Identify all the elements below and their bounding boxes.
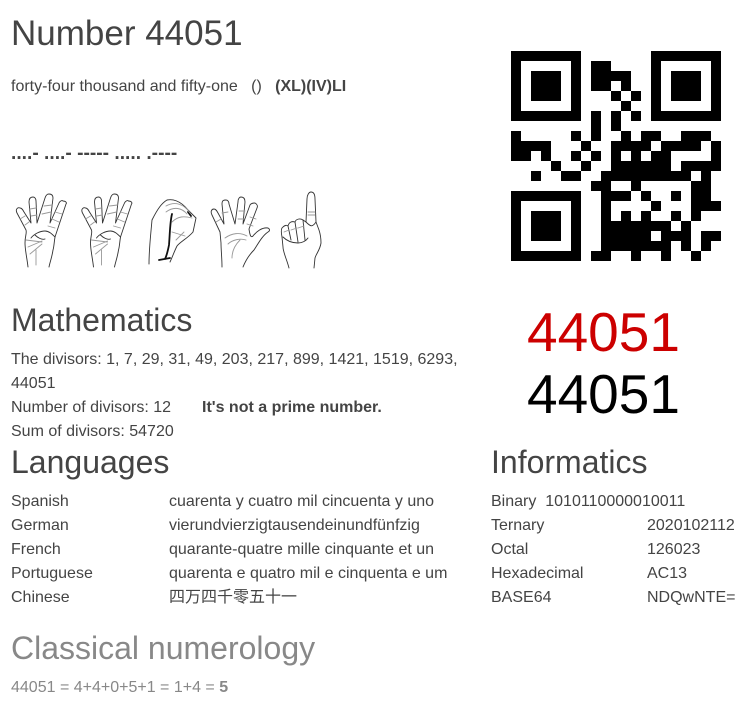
informatics labels: Hexadecimal [491, 565, 583, 582]
number in languages: cuarenta y cuatro mil cincuenta y uno [169, 493, 434, 510]
informatics labels: Ternary [491, 517, 544, 534]
morse code: ....- ....- ----- ..... .---- [11, 143, 177, 164]
divisors list: 44051 [11, 375, 56, 392]
number in languages: vierundvierzigtausendeinundfünfzig [169, 517, 420, 534]
language names: French [11, 541, 61, 558]
numerology sum: 44051 = 4+4+0+5+1 = 1+4 = 5 [11, 679, 228, 696]
number in languages: 四万四千零五十一 [169, 589, 297, 606]
prime note: It's not a prime number. [202, 399, 382, 416]
heading: Languages: Languages [11, 444, 169, 480]
binary row: Binary 1010110000010011 [491, 493, 685, 510]
number of divisors: Number of divisors: 12 [11, 399, 171, 416]
heading: Informatics: Informatics [491, 444, 647, 480]
hand: one [281, 192, 321, 268]
number in languages: quarenta e quatro mil e cinquenta e um [169, 565, 447, 582]
number in words and roman numeral: forty-four thousand and fifty-one () (XL)(IV)LI [11, 78, 346, 95]
number in languages: quarante-quatre mille cinquante et un [169, 541, 434, 558]
QR code [511, 51, 721, 261]
language names: Portuguese [11, 565, 93, 582]
informatics values [647, 517, 735, 606]
informatics labels: BASE64 [491, 589, 551, 606]
informatics labels: Octal [491, 541, 528, 558]
hand: four [82, 194, 132, 267]
heading: Classical numerology: Classical numerology [11, 630, 315, 666]
hand: five [211, 197, 270, 267]
sum of divisors: Sum of divisors: 54720 [11, 423, 174, 440]
informatics labels [491, 517, 583, 606]
black number: 44051 [527, 363, 680, 425]
heading: Mathematics: Mathematics [11, 302, 192, 338]
language names [11, 493, 93, 606]
hand: zero [149, 200, 196, 264]
language names: Chinese [11, 589, 70, 606]
language names: German [11, 517, 69, 534]
informatics values: 126023 [647, 541, 700, 558]
divisors list: The divisors: 1, 7, 29, 31, 49, 203, 217, 899, 1421, 1519, 6293, [11, 351, 458, 368]
title: Number 44051 [11, 14, 243, 53]
informatics values: AC13 [647, 565, 687, 582]
language names: Spanish [11, 493, 69, 510]
red number: 44051 [527, 301, 680, 363]
informatics values: NDQwNTE= [647, 589, 735, 606]
divisors list [11, 351, 458, 392]
hand: four [16, 194, 66, 267]
sign language hands [16, 192, 322, 268]
number in languages [169, 493, 447, 606]
informatics values: 2020102112 [647, 517, 735, 534]
